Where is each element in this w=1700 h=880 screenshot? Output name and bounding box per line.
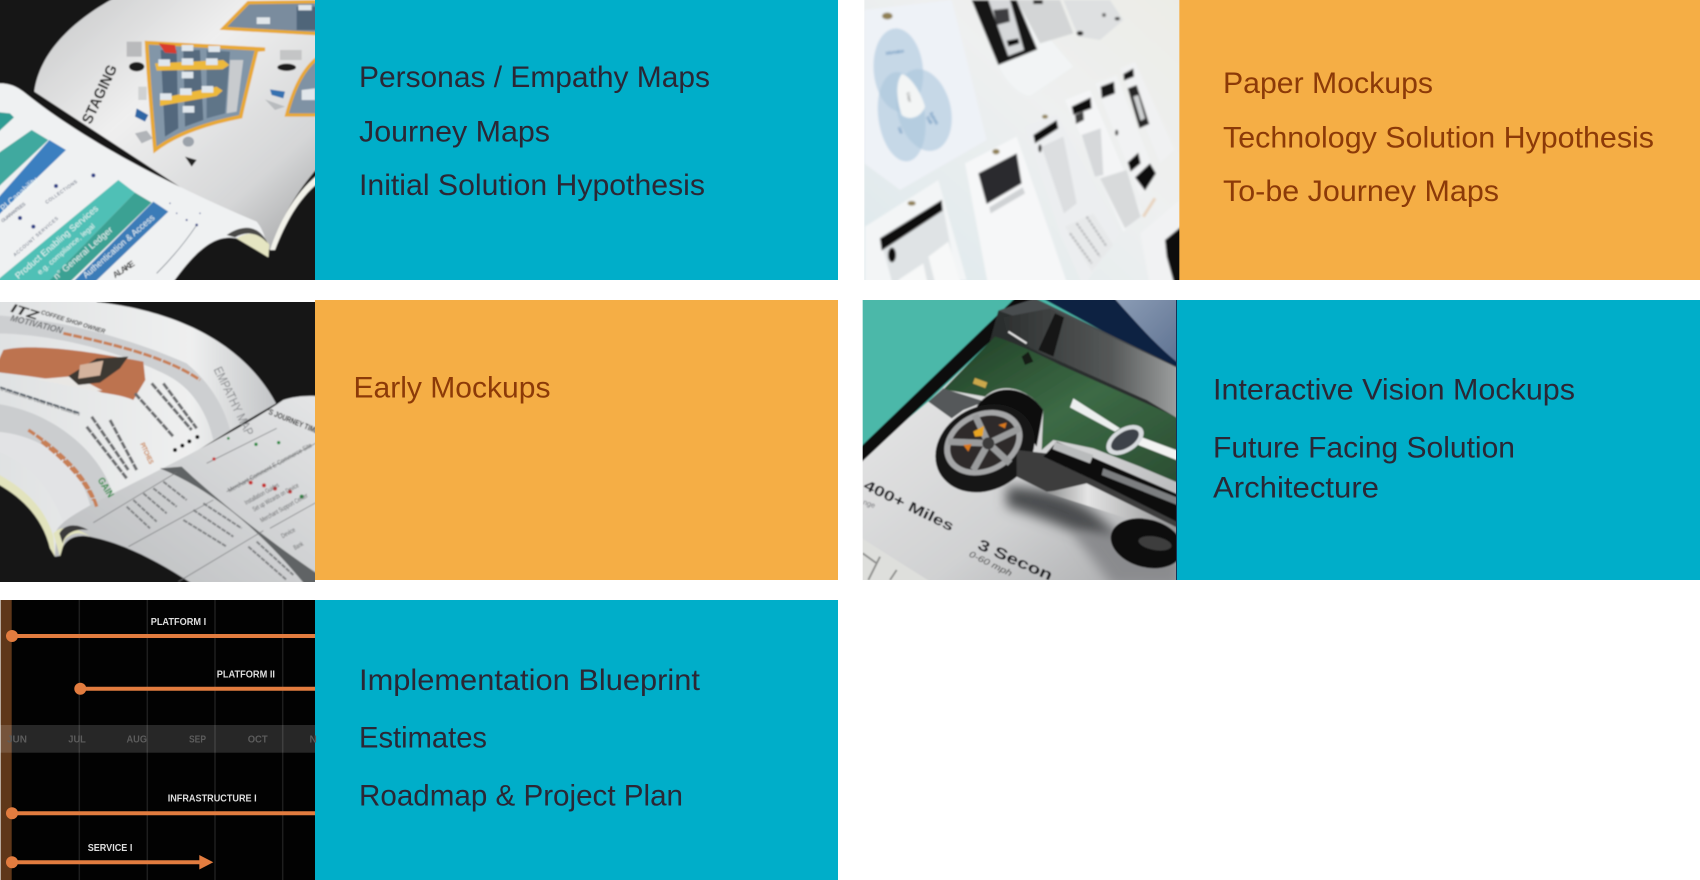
- image text: book labels: e.g. compliance, legal: [35, 221, 97, 277]
- item: Roadmap & Project Plan: [359, 780, 683, 812]
- image text: book labels: [0, 175, 157, 282]
- item: Interactive Vision Mockups: [1213, 374, 1575, 406]
- text block: vision list: [1213, 374, 1575, 504]
- image: open book with empathy map: Device: [280, 527, 297, 540]
- image text: acceleration caption: 0-60 mph: [967, 549, 1014, 578]
- item: Technology Solution Hypothesis: [1223, 122, 1654, 154]
- image text: acceleration stat: 3 Secon: [975, 536, 1055, 585]
- panel: paper prototyping: [857, 0, 1700, 287]
- month band: SEP: [189, 735, 206, 746]
- month band: AUG: [126, 735, 147, 746]
- image: open book with staging diagram: COLLECTIONS: [44, 179, 79, 205]
- image: open book with empathy map: Bank: [293, 541, 305, 552]
- image: open book with staging diagram: [0, 0, 322, 287]
- image text: venn labels: Information: [885, 48, 905, 57]
- image text: range caption: nge: [862, 497, 877, 510]
- panel: vision: [857, 293, 1700, 587]
- image text: book labels: n° General Ledger: [51, 225, 115, 282]
- image text: book labels: Authentication & Access: [81, 212, 157, 280]
- panel background: [1177, 300, 1700, 580]
- image text: staging: STAGING: [79, 62, 121, 127]
- image: open book with empathy map: COFFEE SHOP OWNER: [40, 309, 106, 336]
- item: Personas / Empathy Maps: [359, 61, 710, 94]
- image text: venn labels: User: [896, 126, 904, 135]
- panel: early concepts: [0, 293, 838, 590]
- panel background: [315, 300, 838, 580]
- bar: infrastructure I: [6, 794, 315, 819]
- image: wireframes pinned on wall: [857, 0, 1187, 287]
- item: Architecture: [1213, 472, 1379, 504]
- text block: prototyping list: [1223, 67, 1654, 208]
- item: Paper Mockups: [1223, 67, 1433, 100]
- image text: venn labels: Goals: [924, 115, 934, 126]
- panel background: [315, 0, 838, 280]
- bar: platform I: PLATFORM I: [151, 617, 206, 628]
- image: tablet showing green electric truck: [857, 293, 1188, 587]
- image text: book labels: Product Enabling Services: [13, 203, 101, 281]
- bar: infrastructure I: INFRASTRUCTURE I: [168, 794, 257, 805]
- month band: JUN: [7, 735, 27, 746]
- bar: platform II: PLATFORM II: [217, 669, 275, 680]
- image: open book with empathy map: [0, 293, 322, 590]
- image: open book with empathy map: Merchant Comment E-Commerce Site: [227, 442, 314, 494]
- item: Initial Solution Hypothesis: [359, 169, 705, 202]
- bar: service I: [6, 843, 213, 870]
- divider: [1176, 300, 1177, 580]
- month band: JUL: [68, 735, 86, 746]
- image: open book with staging diagram: GUARANTEES: [0, 201, 27, 223]
- image: open book with empathy map: Merchant Support Center: [259, 492, 310, 524]
- image: open book with empathy map: MOTIVATION: [10, 313, 64, 336]
- bar: service I: SERVICE I: [88, 843, 133, 854]
- item: Implementation Blueprint: [359, 664, 701, 697]
- text block: discovery list: [359, 61, 710, 202]
- image text: venn labels: Business: [928, 111, 940, 126]
- image: open book with staging diagram: ACCOUNT SERVICES: [12, 215, 60, 257]
- item: Estimates: [359, 722, 487, 754]
- image text: venn labels: User: [906, 92, 912, 103]
- image: open book with empathy map: PITCHES: [138, 442, 154, 466]
- image: open book with empathy map: 'S JOURNEY TIME: [266, 407, 321, 436]
- image: open book with staging diagram: A LAKE: [111, 258, 137, 280]
- image text: venn labels: [885, 48, 940, 135]
- item: Journey Maps: [359, 116, 550, 148]
- month band: [0, 725, 317, 753]
- image: open book with empathy map: Installation Guides: [244, 482, 281, 507]
- image: open book with empathy map: Set up Wizards on Device: [252, 482, 300, 513]
- month band: N: [310, 735, 317, 746]
- bar: platform II: [74, 669, 315, 695]
- image text: range stat: 400+ Miles: [861, 478, 956, 535]
- item: To-be Journey Maps: [1223, 175, 1499, 208]
- image: open book with empathy map: GAIN: [95, 476, 116, 500]
- panel: discovery artifacts: [0, 0, 838, 287]
- panel background: [315, 600, 838, 880]
- text block: delivery list: [359, 664, 701, 812]
- panel background: [1179, 0, 1700, 280]
- panel: delivery planning: [0, 600, 838, 880]
- image: open book with empathy map: EMPATHY MAP: [211, 365, 256, 438]
- image text: book labels: ITZ: [9, 301, 42, 323]
- bar: platform I: [6, 617, 315, 642]
- month band: OCT: [248, 735, 268, 746]
- text block: early mockups: Early Mockups: [354, 372, 550, 404]
- chart: roadmap timeline: [0, 600, 317, 880]
- image: open book with empathy map: to discuss over an Coffee and the customers: [0, 386, 81, 417]
- item: Future Facing Solution: [1213, 432, 1515, 464]
